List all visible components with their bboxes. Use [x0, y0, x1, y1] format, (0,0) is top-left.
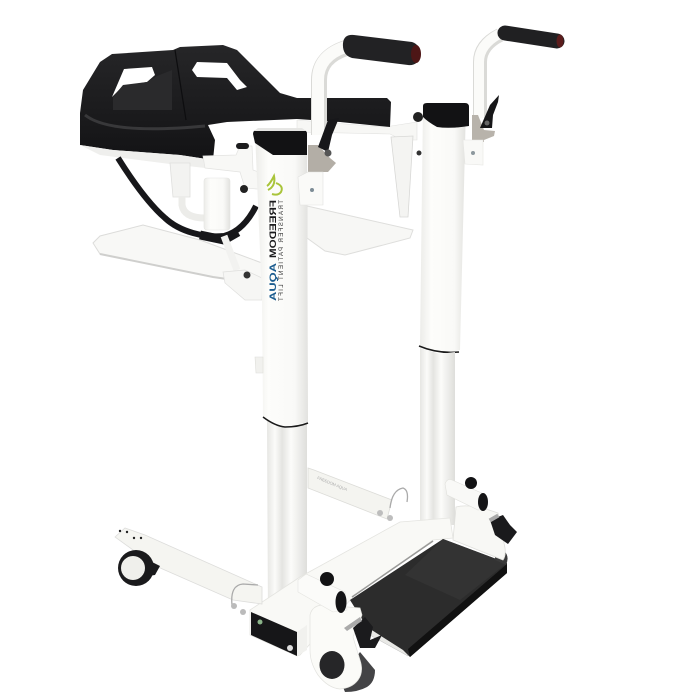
white seat rim under pad	[80, 145, 213, 168]
base platform	[250, 518, 453, 656]
logo: green swoosh	[267, 176, 282, 195]
power box	[251, 612, 307, 656]
left seat panel	[93, 225, 262, 284]
right leg tube	[308, 468, 408, 521]
left lever clamp	[298, 118, 339, 205]
right seat panel	[307, 206, 413, 255]
brand text on post: AQUA	[268, 263, 278, 302]
black backrest pad	[80, 45, 391, 160]
left arm support	[203, 143, 270, 193]
black safety strap	[118, 158, 256, 240]
pivot elbow and cylinder	[170, 163, 237, 270]
black foot plate	[350, 539, 507, 657]
rear caster	[118, 550, 160, 586]
front post lower tube	[263, 417, 308, 620]
front post upper	[253, 128, 308, 427]
right leg tube: FREEDOM AQUA	[316, 475, 348, 492]
right lever clamp	[463, 95, 499, 165]
left leg	[115, 528, 262, 615]
front caster and clamp	[298, 572, 382, 692]
brand text on post: FREEDOM	[268, 200, 278, 258]
right caster and clamp	[445, 477, 517, 565]
rear right seat bracket	[297, 112, 423, 217]
brand text on post	[268, 200, 285, 302]
back post lower tube	[420, 348, 455, 525]
left handle	[318, 35, 421, 135]
back post upper	[419, 103, 469, 354]
lower pivot block	[223, 270, 262, 300]
brand text on post: TRANSFER PATIENT LIFT	[278, 200, 285, 301]
right handle	[479, 33, 564, 118]
